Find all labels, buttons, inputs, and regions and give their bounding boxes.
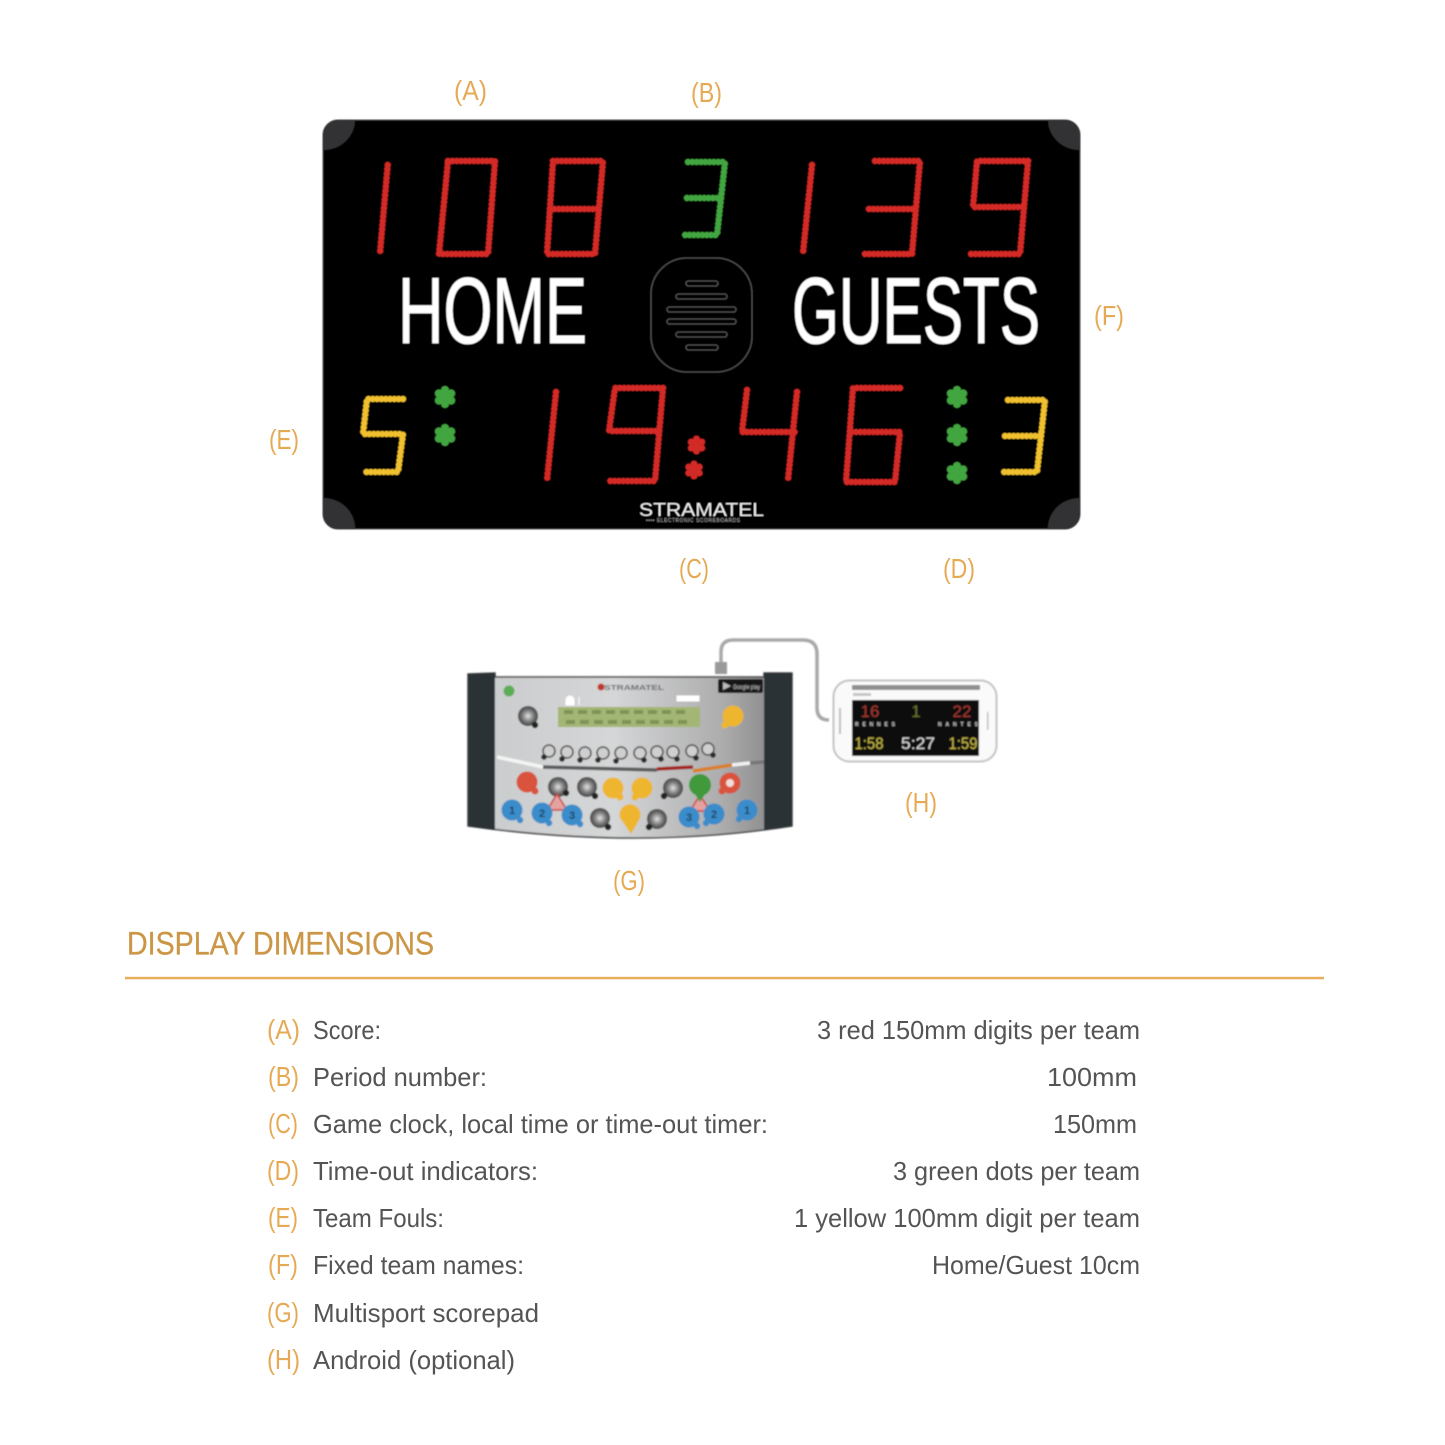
green button [689,774,711,802]
row D: (D) [267,1155,299,1186]
usb connector [715,662,727,674]
dimensions table [267,1014,1140,1375]
game clock 19:46 [547,388,900,482]
button numbers: 3 [569,810,575,822]
row D [267,1155,1140,1186]
row E [268,1202,1140,1233]
phone team names: NANTES [938,722,979,728]
scoreboard [323,120,1080,529]
row F [268,1249,1140,1280]
label F: (F) [1094,300,1124,331]
button numbers: 1 [744,805,750,817]
row D: Time-out indicators: [313,1156,538,1186]
button numbers: 2 [711,809,717,821]
home time-out dots [435,386,455,446]
row B: (B) [268,1061,299,1092]
brand logo: STRAMATEL [604,683,665,692]
period number 3 [682,162,725,235]
label A: (A) [454,75,487,106]
row F: Fixed team names: [313,1250,524,1280]
row F: Home/Guest 10cm [932,1250,1140,1280]
blue buttons [502,800,758,829]
row C: Game clock, local time or time-out timer: [313,1109,768,1139]
white icons [566,696,699,705]
lcd screen [558,707,700,727]
board corners [323,120,1080,529]
label H: (H) [905,787,937,818]
row C: 150mm [1053,1109,1137,1139]
guests time-out dots [947,386,967,484]
label E: (E) [269,424,299,455]
row B [268,1061,1137,1092]
row H: (H) [267,1344,300,1375]
stramatel logo: STRAMATEL [639,500,764,520]
controller body [468,673,792,838]
row G: Multisport scorepad [313,1298,539,1328]
phone side details [839,708,988,734]
row A: 3 red 150mm digits per team [817,1015,1140,1045]
team name: home: HOME [398,258,587,363]
side grips [468,673,495,830]
phone timers: 5:27 [901,734,935,753]
grey round buttons [518,706,683,829]
phone scores: 1 [911,702,921,721]
label G: (G) [613,865,645,896]
store badge [718,679,763,693]
status bar [852,685,980,690]
phone scores: 16 [861,702,879,721]
label C: (C) [679,553,709,584]
status led [504,686,514,696]
multisport scorepad controller [468,640,829,838]
row C [268,1108,1137,1139]
team name: guests: GUESTS [792,258,1040,363]
button numbers: 1 [509,805,515,817]
stramatel logo: •••• ELECTRONIC SCOREBOARDS [646,518,741,524]
row A: (A) [267,1014,300,1045]
row B: Period number: [313,1062,487,1092]
home fouls 5 [363,399,403,472]
row E: Team Fouls: [313,1203,444,1233]
red warning triangles [547,794,710,811]
guests score 139 [803,161,1028,254]
row F: (F) [268,1249,298,1280]
small button tabs [541,752,716,764]
phone scores [861,702,971,721]
button numbers [509,805,750,824]
row B: 100mm [1047,1062,1137,1092]
row A [267,1014,1140,1045]
red buttons [516,772,740,794]
row E: (E) [268,1202,298,1233]
android phone [834,680,996,762]
row E: 1 yellow 100mm digit per team [794,1203,1140,1233]
home score 108 [380,161,603,254]
label D: (D) [943,553,975,584]
phone timers: 1:58 [854,734,884,753]
button numbers: 3 [686,812,692,824]
brand logo [598,683,665,692]
row H: Android (optional) [313,1345,515,1375]
phone timers: 1:59 [948,734,978,753]
button numbers: 2 [539,808,545,820]
board panel [323,120,1080,529]
small function buttons [543,743,714,759]
speaker grille [651,258,752,372]
guests fouls 3 [1000,400,1045,472]
row G: (G) [267,1297,299,1328]
phone timers [854,734,978,753]
yellow buttons [602,706,744,834]
label B: (B) [691,77,722,108]
callout labels [269,75,1124,896]
heading: DISPLAY DIMENSIONS [127,926,434,962]
phone scores: 22 [953,702,971,721]
row D: 3 green dots per team [893,1156,1140,1186]
mode strip [497,757,764,771]
row A: Score: [313,1015,381,1045]
phone body [834,680,996,762]
phone screen [852,700,979,756]
grey button tabs [532,722,667,830]
row C: (C) [268,1108,298,1139]
phone team names [855,722,979,728]
cable [721,640,829,720]
phone team names: RENNES [855,722,896,728]
store badge: Google play [733,685,760,691]
app bar [853,693,871,696]
